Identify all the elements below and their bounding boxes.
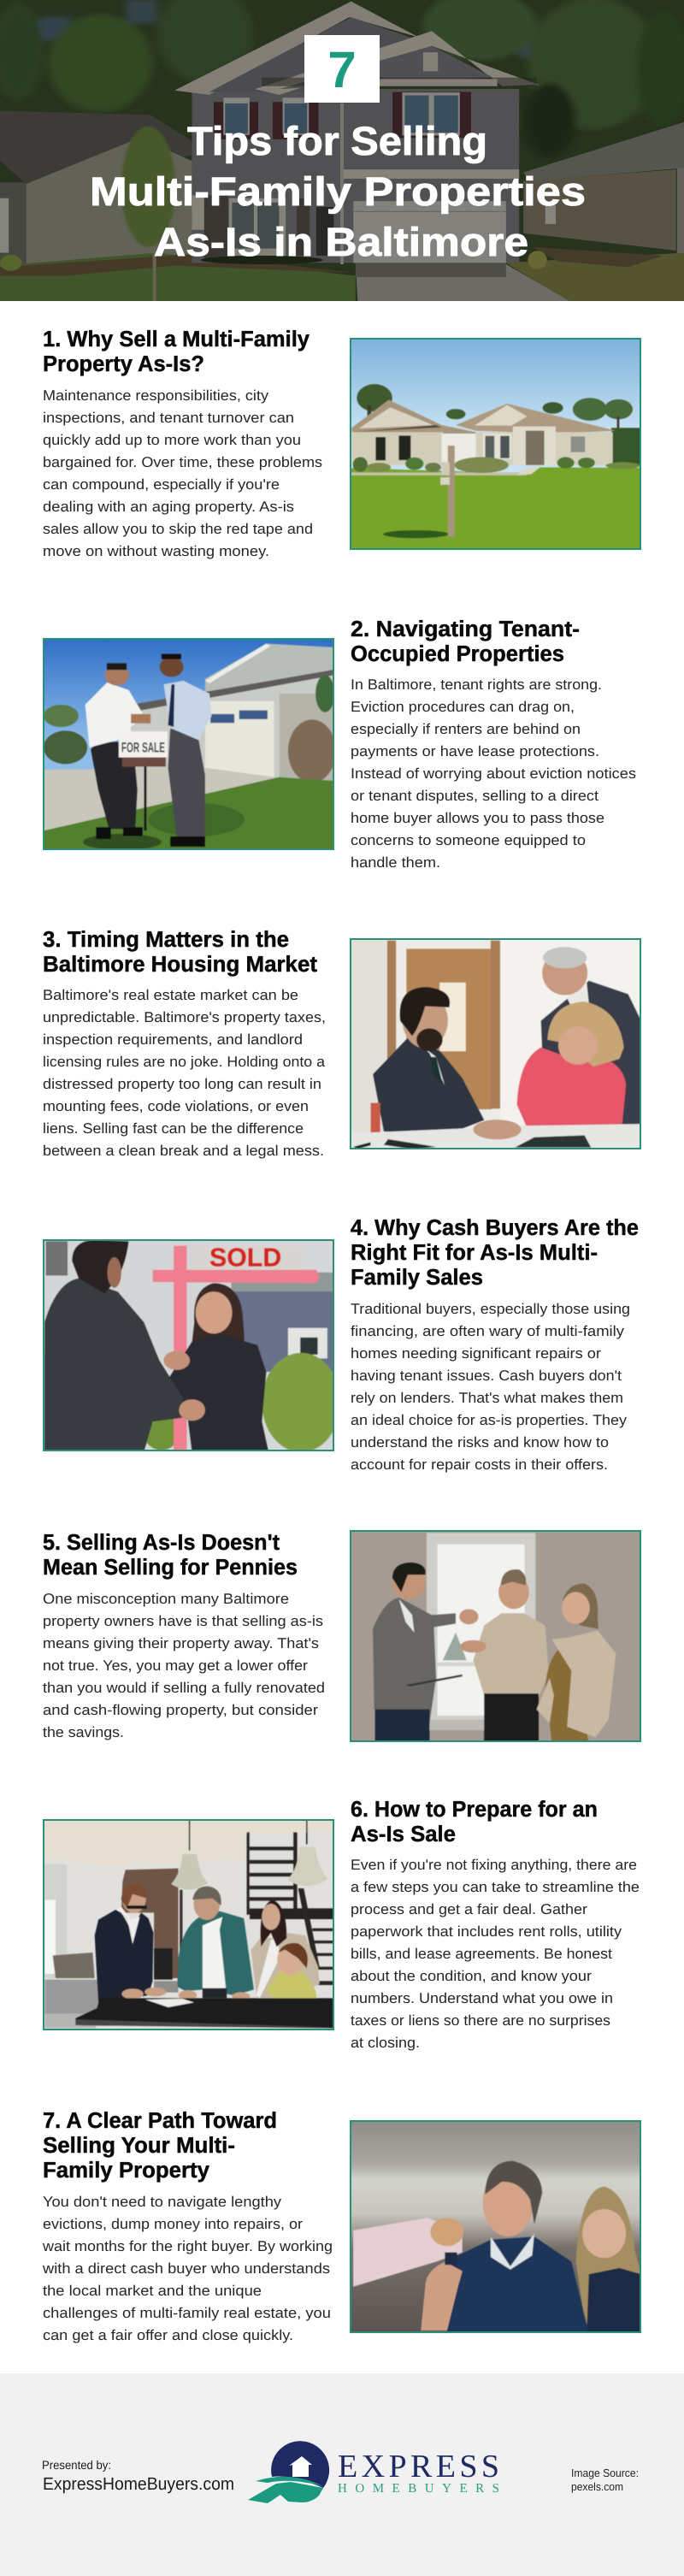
- text block: tip 5: and cash-flowing property, but consider: [43, 1702, 318, 1718]
- text block: tip 2: especially if renters are behind on: [351, 721, 581, 737]
- image source credit: Image Source:: [571, 2467, 639, 2479]
- heading: tip 6: 6. How to Prepare for an: [351, 1796, 598, 1822]
- text block: tip 1: quickly add up to more work than you: [43, 432, 301, 448]
- heading: tip 7: [43, 2107, 277, 2183]
- text block: tip 1: inspections, and tenant turnover can: [43, 410, 294, 426]
- text block: tip 7: the local market and the unique: [43, 2283, 262, 2299]
- heading: tip 1: [43, 326, 310, 376]
- text block: tip 6: process and get a fair deal. Gather: [351, 1901, 587, 1917]
- heading: tip 2: [351, 616, 580, 666]
- text block: tip 7: can get a fair offer and close quickly.: [43, 2327, 293, 2343]
- badge: number seven: 7: [327, 41, 357, 98]
- title: [90, 118, 586, 264]
- text block: tip 4: understand the risks and know how to: [351, 1434, 609, 1450]
- text block: tip 7: evictions, dump money into repairs, or: [43, 2216, 303, 2232]
- text block: tip 1: dealing with an aging property. As-is: [43, 499, 294, 515]
- heading: tip 7: Family Property: [43, 2157, 210, 2183]
- text block: tip 2: Eviction procedures can drag on,: [351, 699, 575, 715]
- text block: tip 2: In Baltimore, tenant rights are strong.: [351, 676, 602, 693]
- heading: tip 4: [351, 1214, 639, 1290]
- text block: tip 7: wait months for the right buyer. By working: [42, 2238, 333, 2254]
- heading: tip 5: [43, 1529, 298, 1580]
- text block: tip 3: between a clean break and a legal mess.: [43, 1143, 324, 1159]
- heading: tip 3: Baltimore Housing Market: [43, 951, 317, 977]
- text block: tip 4: financing, are often wary of multi-family: [351, 1323, 625, 1339]
- text block: tip 5: than you would if selling a fully renovated: [43, 1680, 325, 1696]
- heading: tip 7: 7. A Clear Path Toward: [43, 2107, 277, 2133]
- heading: tip 4: Right Fit for As-Is Multi-: [351, 1239, 598, 1265]
- text block: tip 1: bargained for. Over time, these problems: [43, 454, 322, 470]
- text block: tip 2: concerns to someone equipped to: [351, 832, 586, 848]
- image source credit: [571, 2467, 639, 2493]
- text block: tip 3: unpredictable. Baltimore's property taxes,: [43, 1009, 326, 1025]
- logo: Express HomeBuyers: HOMEBUYERS: [338, 2482, 499, 2496]
- image: family at kitchen table with agent: [43, 1819, 334, 2030]
- text block: tip 6: taxes or liens so there are no surprises: [351, 2012, 610, 2029]
- heading: tip 4: Family Sales: [351, 1264, 483, 1290]
- text block: tip 3: licensing rules are no joke. Holding onto a: [43, 1054, 326, 1070]
- main house: [192, 89, 519, 263]
- text block: tip 2: Instead of worrying about eviction notices: [351, 765, 636, 782]
- text block: tip 6: at closing.: [351, 2035, 420, 2051]
- text block: tip 4: homes needing significant repairs or: [351, 1345, 601, 1362]
- panel: footer: [0, 2373, 684, 2576]
- heading: tip 1: 1. Why Sell a Multi-Family: [43, 326, 310, 352]
- text block: tip 1: [43, 387, 322, 559]
- image: two men shaking hands by for sale sign: [43, 638, 336, 850]
- text block: tip 2: payments or have lease protections.: [351, 743, 599, 759]
- image: agent handing keys under sold sign: [43, 1239, 340, 1452]
- windows: [214, 102, 258, 139]
- title: Tips for Selling: [187, 118, 487, 163]
- heading: tip 6: [351, 1796, 598, 1846]
- text block: tip 6: bills, and lease agreements. Be honest: [351, 1946, 612, 1962]
- image: agent and couple signing papers: [350, 938, 641, 1149]
- title: As-Is in Baltimore: [154, 219, 528, 264]
- image: two men shaking hands by for sale sign: FOR SALE: [121, 740, 165, 755]
- text block: tip 4: [351, 1301, 630, 1473]
- image: agent handing keys under sold sign: SOLD: [209, 1243, 281, 1272]
- text block: tip 2: [351, 676, 636, 871]
- heading: tip 7: Selling Your Multi-: [43, 2132, 235, 2158]
- heading: tip 3: [43, 926, 317, 977]
- heading: tip 5: Mean Selling for Pennies: [43, 1554, 298, 1580]
- text block: tip 4: Traditional buyers, especially those using: [351, 1301, 630, 1317]
- heading: tip 5: 5. Selling As-Is Doesn't: [43, 1529, 280, 1555]
- text block: tip 6: paperwork that includes rent rolls, utility: [351, 1923, 622, 1940]
- text block: tip 3: liens. Selling fast can be the difference: [43, 1120, 304, 1137]
- text block: tip 5: [43, 1591, 325, 1740]
- right neighbor: [523, 122, 684, 181]
- text block: tip 1: Maintenance responsibilities, city: [43, 387, 269, 404]
- text block: tip 1: can compound, especially if you're: [43, 476, 280, 493]
- text block: tip 1: sales allow you to skip the red tape and: [43, 521, 313, 537]
- text block: tip 3: mounting fees, code violations, or even: [43, 1098, 309, 1114]
- image: agent giving keys to couple by window: [350, 1530, 641, 1742]
- title: Multi-Family Properties: [90, 168, 586, 214]
- logo: Express HomeBuyers: EXPRESS: [338, 2449, 499, 2484]
- text block: tip 3: inspection requirements, and landlord: [43, 1031, 303, 1048]
- logo: Express HomeBuyers: [248, 2441, 499, 2503]
- text block: tip 1: move on without wasting money.: [43, 543, 269, 559]
- text block: tip 6: about the condition, and know your: [351, 1968, 592, 1984]
- panel: hero header photo of houses: [0, 0, 684, 301]
- text block: tip 7: You don't need to navigate lengthy: [43, 2194, 282, 2210]
- text block: tip 3: Baltimore's real estate market can be: [43, 987, 298, 1003]
- text block: tip 6: numbers. Understand what you owe in: [351, 1990, 613, 2006]
- text block: tip 5: not true. Yes, you may get a lower offer: [43, 1657, 308, 1674]
- heading: tip 4: 4. Why Cash Buyers Are the: [351, 1214, 639, 1240]
- heading: tip 1: Property As-Is?: [43, 351, 204, 376]
- text block: tip 5: means giving their property away. That's: [43, 1635, 319, 1651]
- heading: tip 2: 2. Navigating Tenant-: [351, 616, 580, 641]
- badge: number seven: [304, 35, 380, 103]
- text block: tip 2: or tenant disputes, selling to a direct: [351, 788, 598, 804]
- presented by credit: ExpressHomeBuyers.com: [43, 2474, 234, 2494]
- presented by credit: [42, 2458, 234, 2494]
- lower: [204, 195, 228, 258]
- text block: tip 5: property owners have is that selling as-is: [43, 1613, 323, 1629]
- text block: tip 7: challenges of multi-family real estate, you: [43, 2305, 331, 2321]
- heading: tip 2: Occupied Properties: [351, 641, 564, 666]
- text block: tip 3: distressed property too long can result in: [43, 1076, 321, 1092]
- presented by credit: Presented by:: [42, 2458, 111, 2472]
- text block: tip 4: an ideal choice for as-is properties. They: [351, 1412, 628, 1428]
- text block: tip 4: rely on lenders. That's what makes them: [351, 1390, 623, 1406]
- text block: tip 4: account for repair costs in their offers.: [351, 1456, 608, 1473]
- image source credit: pexels.com: [571, 2480, 623, 2493]
- text block: tip 3: [43, 987, 326, 1159]
- ground: [0, 253, 356, 301]
- text block: tip 2: home buyer allows you to pass those: [351, 810, 604, 826]
- text block: tip 6: a few steps you can take to streamline the: [351, 1879, 640, 1895]
- heading: tip 6: As-Is Sale: [351, 1821, 456, 1846]
- text block: tip 6: [351, 1857, 640, 2051]
- text block: tip 7: with a direct cash buyer who understands: [42, 2260, 330, 2277]
- text block: tip 2: handle them.: [351, 854, 440, 871]
- text block: tip 7: [42, 2194, 333, 2343]
- heading: tip 3: 3. Timing Matters in the: [43, 926, 289, 952]
- text block: tip 6: Even if you're not fixing anything, there are: [351, 1857, 637, 1873]
- left neighbor: [0, 110, 192, 184]
- text block: tip 5: the savings.: [43, 1724, 124, 1740]
- text block: tip 5: One misconception many Baltimore: [43, 1591, 289, 1607]
- image: house with sign post in lawn: [350, 338, 641, 550]
- text block: tip 4: having tenant issues. Cash buyers don't: [351, 1368, 622, 1384]
- image: couple receiving keys: [350, 2120, 641, 2333]
